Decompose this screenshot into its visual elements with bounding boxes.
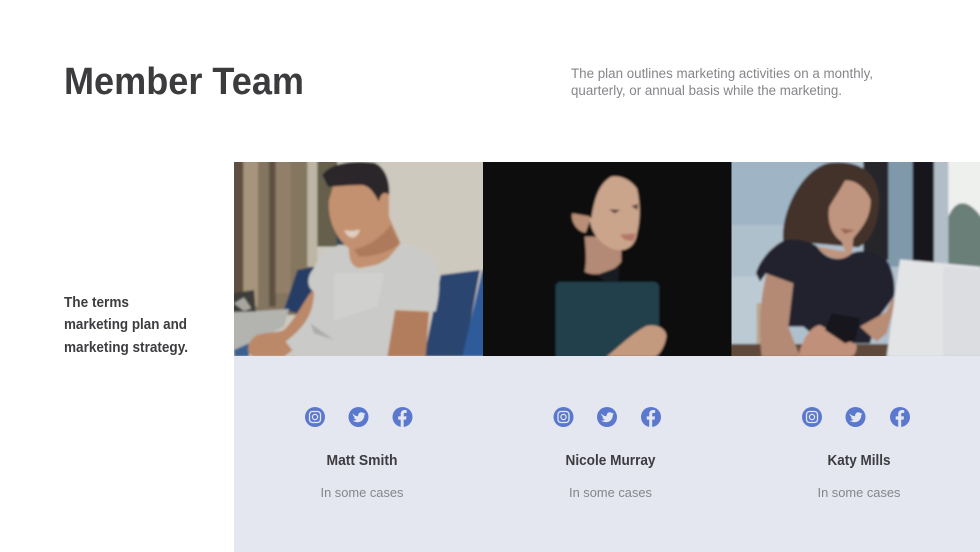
role: Matt Smith: In some cases <box>320 485 404 500</box>
social icons: Katy Mills <box>802 407 910 427</box>
social icons: Matt Smith <box>305 407 412 427</box>
description text: quarterly, or annual basis while the marketing. <box>571 83 842 98</box>
social icons: Nicole Murray <box>554 407 661 427</box>
side note text <box>64 295 188 356</box>
photo: Nicole Murray <box>480 158 736 362</box>
card: Matt Smith <box>305 407 412 500</box>
title: Member Team <box>64 61 304 103</box>
role: Nicole Murray: In some cases <box>569 485 652 500</box>
description text: The plan outlines marketing activities on a monthly, <box>571 66 873 81</box>
name: Nicole Murray: Nicole Murray <box>566 452 656 469</box>
side note text: marketing strategy. <box>64 340 188 356</box>
description text <box>571 66 873 98</box>
photo: Matt Smith <box>231 158 487 362</box>
card: Katy Mills <box>802 407 910 500</box>
panel: team cards background <box>234 356 980 552</box>
side note text: marketing plan and <box>64 317 187 333</box>
role: Katy Mills: In some cases <box>818 485 901 500</box>
card: Nicole Murray <box>554 407 661 500</box>
photo: Katy Mills <box>730 158 980 362</box>
side note text: The terms <box>64 295 129 311</box>
name: Matt Smith: Matt Smith <box>326 452 398 469</box>
name: Katy Mills: Katy Mills <box>828 452 890 469</box>
